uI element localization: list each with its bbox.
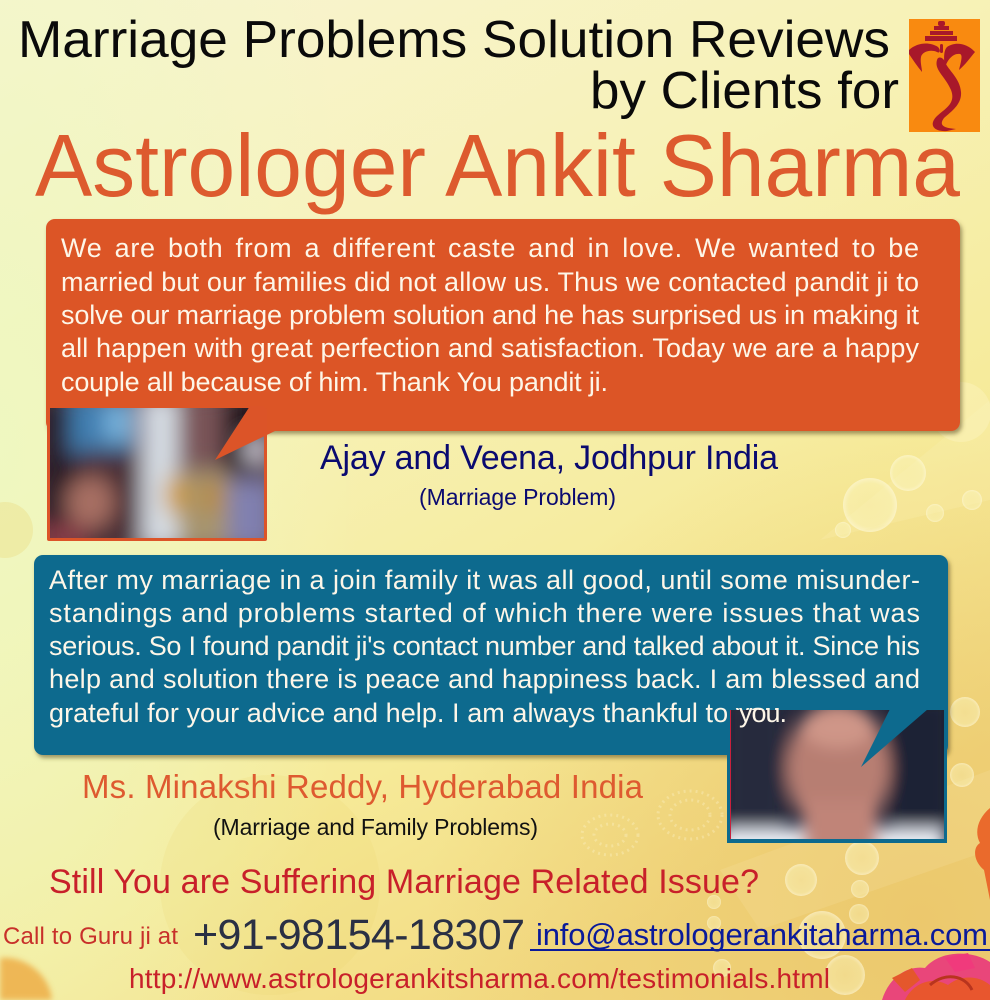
testimonial 1 text — [61, 233, 920, 397]
flower: right edge — [975, 808, 990, 900]
testimonial 2 overlapping word: you. — [739, 698, 787, 728]
testimonial 1 bubble tail — [215, 406, 275, 460]
testimonial 2 problem: (Marriage and Family Problems) — [213, 814, 538, 840]
testimonial 1 speech bubble — [46, 219, 960, 431]
testimonial 2 photo — [727, 710, 947, 843]
website URL: http://www.astrologerankitsharma.com/testimonials.html — [129, 963, 830, 994]
testimonial 2 speech bubble — [34, 555, 948, 755]
testimonial 2 text: grateful for your advice and help. I am always thankful to you. — [49, 698, 787, 728]
title line 1: Marriage Problems Solution Reviews — [18, 11, 890, 69]
title line 2: by Clients for — [590, 62, 899, 120]
testimonial 2 text — [49, 565, 920, 728]
phone number: +91-98154-18307 — [193, 911, 525, 959]
icon: Ganesha logo — [909, 19, 980, 132]
title: Astrologer Ankit Sharma: Astrologer Ankit Sharma — [35, 116, 960, 215]
call to action heading: Still You are Suffering Marriage Related Issue? — [49, 863, 759, 901]
testimonial 2 name: Ms. Minakshi Reddy, Hyderabad India — [82, 768, 644, 805]
email link: info@astrologerankitaharma.com — [536, 917, 988, 952]
testimonial 2 text: help and solution there is peace and happiness back. I am blessed and — [49, 664, 920, 694]
testimonial 1 text: married but our families did not allow us. Thus we contacted pandit ji to — [61, 267, 919, 297]
testimonial 1 text: We are both from a different caste and in love. We wanted to be — [61, 233, 919, 263]
testimonial 1 photo — [47, 408, 275, 541]
testimonial 2 bubble tail — [861, 709, 928, 767]
testimonial 1 text: couple all because of him. Thank You pandit ji. — [61, 367, 608, 397]
testimonial 1 text: all happen with great perfection and satisfaction. Today we are a happy — [61, 333, 920, 363]
testimonial 2 text: standings and problems started of which there were issues that was — [49, 598, 920, 628]
flower: bottom-right rose — [882, 953, 990, 1000]
testimonial 2 text: After my marriage in a join family it was all good, until some misunder- — [49, 565, 920, 595]
call label: Call to Guru ji at — [3, 923, 178, 950]
testimonial 1 text: solve our marriage problem solution and he has surprised us in making it — [61, 300, 919, 330]
testimonial 1 problem: (Marriage Problem) — [419, 484, 616, 510]
testimonial 1 name: Ajay and Veena, Jodhpur India — [320, 439, 778, 477]
testimonial 2 text: serious. So I found pandit ji's contact number and talked about it. Since his — [49, 631, 920, 661]
